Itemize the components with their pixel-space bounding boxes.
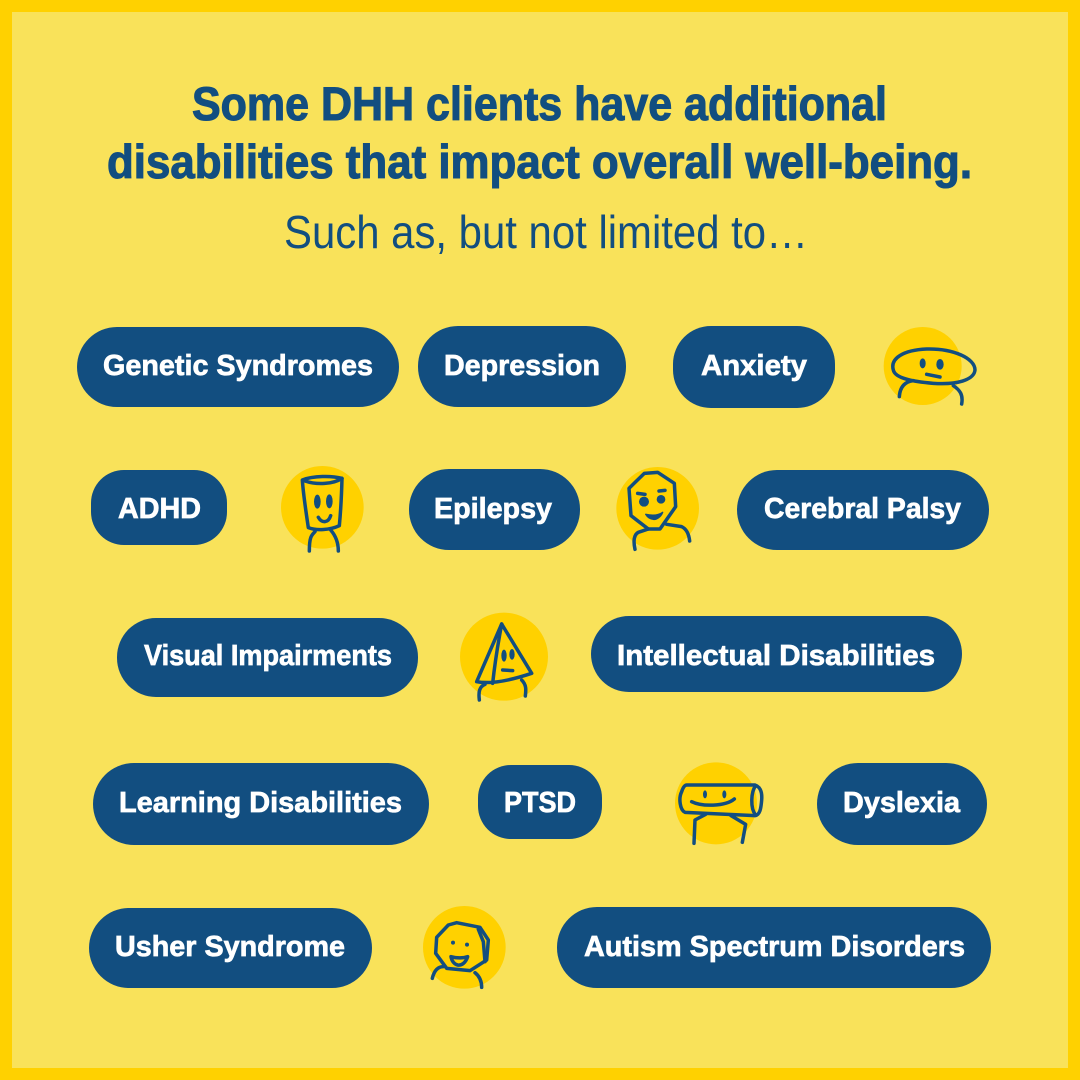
- subtitle: Such as, but not limited to…: [284, 206, 808, 258]
- icon: oval head character: [884, 327, 975, 405]
- title: [107, 77, 972, 188]
- pill: Learning Disabilities: Learning Disabilities: [119, 787, 402, 819]
- icon: faceted head character: [423, 906, 506, 989]
- pill: ADHD: ADHD: [118, 493, 201, 525]
- pill: Autism Spectrum Disorders: [557, 907, 991, 988]
- pill: Epilepsy: [409, 469, 580, 550]
- pill: Dyslexia: Dyslexia: [843, 787, 961, 819]
- pill: Depression: Depression: [444, 350, 600, 382]
- pill: Visual Impairments: [117, 618, 418, 697]
- icon: polygon head character: [616, 467, 699, 550]
- pill: Epilepsy: Epilepsy: [434, 493, 552, 525]
- pill: PTSD: PTSD: [504, 787, 576, 819]
- pill: Autism Spectrum Disorders: Autism Spectrum Disorders: [584, 931, 965, 963]
- pill: Anxiety: Anxiety: [701, 350, 807, 382]
- pill: Genetic Syndromes: [77, 327, 399, 407]
- pill: Cerebral Palsy: [737, 470, 989, 550]
- pill: Intellectual Disabilities: Intellectual Disabilities: [617, 640, 935, 672]
- icon: cone head character: [460, 613, 548, 701]
- icon: cylinder head character: [675, 762, 762, 844]
- pill: Usher Syndrome: [89, 908, 372, 988]
- pill: Dyslexia: [817, 763, 987, 845]
- pill: ADHD: [91, 470, 227, 545]
- pill: PTSD: [478, 765, 602, 839]
- pill: Anxiety: [673, 326, 835, 408]
- title: disabilities that impact overall well-being.: [107, 135, 972, 188]
- icon: cup head character: [281, 466, 364, 551]
- pill: Visual Impairments: Visual Impairments: [144, 640, 392, 672]
- pill: Usher Syndrome: Usher Syndrome: [115, 931, 345, 963]
- pill: Depression: [418, 326, 626, 407]
- pill: Intellectual Disabilities: [591, 616, 962, 692]
- title: Some DHH clients have additional: [192, 77, 887, 130]
- pill: Genetic Syndromes: Genetic Syndromes: [103, 350, 373, 382]
- pill: Learning Disabilities: [93, 763, 429, 845]
- pill: Cerebral Palsy: Cerebral Palsy: [764, 493, 961, 525]
